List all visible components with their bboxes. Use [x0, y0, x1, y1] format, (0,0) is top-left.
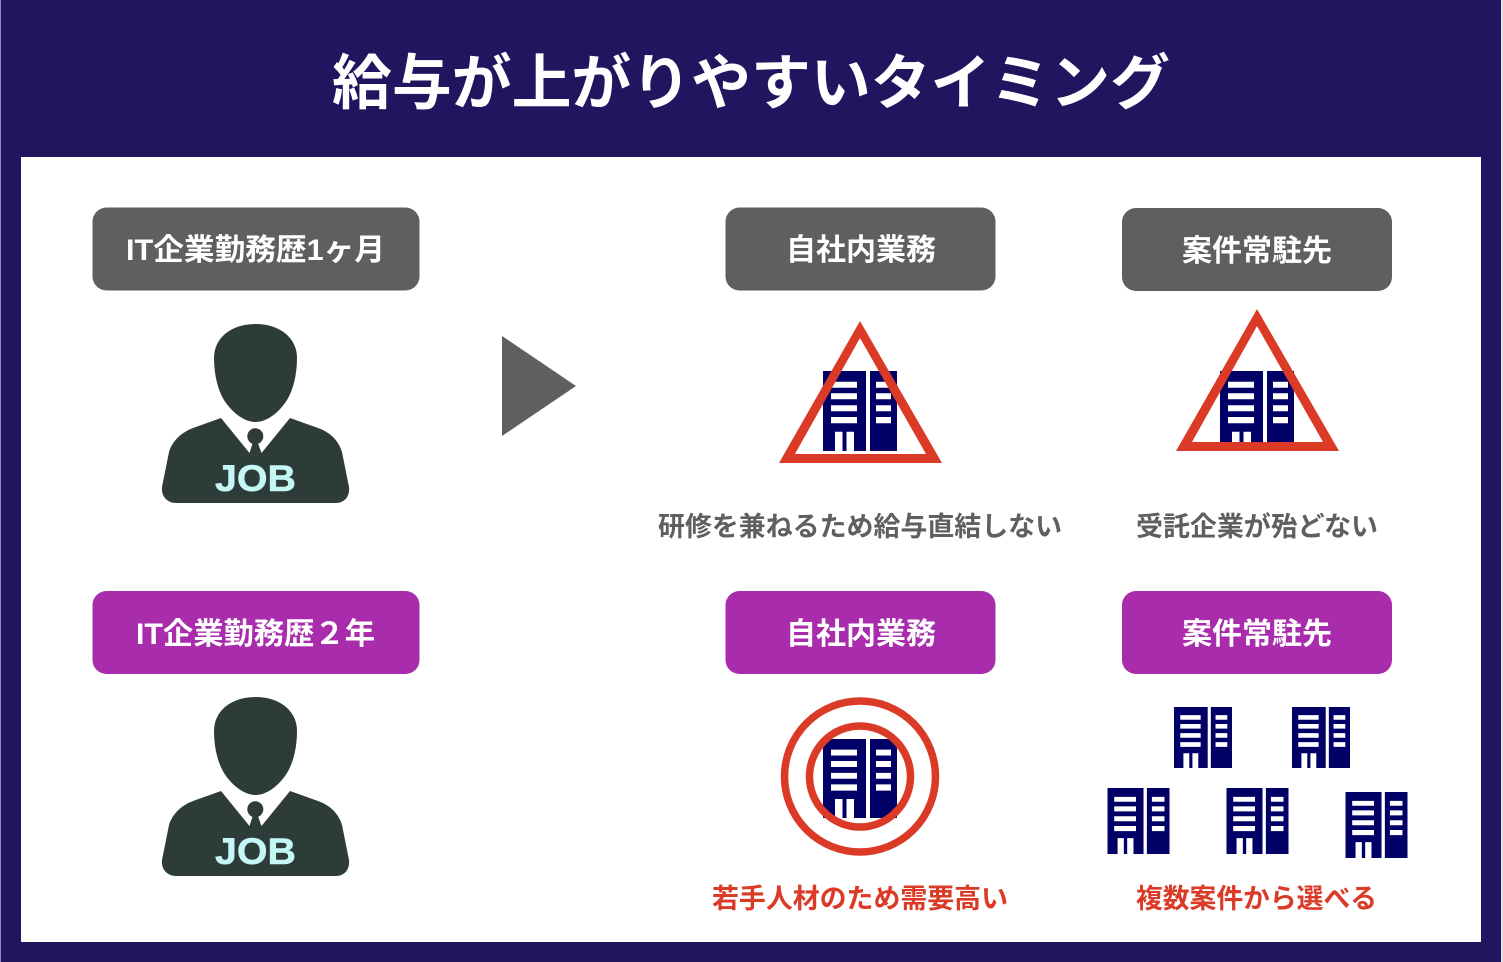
caption: client site drawback: 受託企業が殆どない	[1136, 511, 1378, 542]
label: in-house work, top	[726, 208, 996, 290]
icon: job person, one month	[162, 324, 349, 503]
label: one month tenure	[92, 208, 420, 290]
icon: building with double circle	[784, 701, 936, 852]
label: client site work, bottom: 案件常駐先	[1182, 618, 1332, 651]
label: one month tenure: IT企業勤務歴1ヶ月	[126, 234, 385, 267]
caption: in-house benefit: 若手人材のため需要高い	[712, 884, 1008, 914]
icon: job person, one month: JOB	[215, 458, 296, 499]
title: 給与が上がりやすいタイミング	[332, 50, 1170, 117]
label: two years tenure: IT企業勤務歴２年	[136, 618, 375, 651]
label: client site work, bottom	[1122, 591, 1392, 674]
arrow	[502, 336, 576, 436]
white content panel	[21, 157, 1481, 942]
label: client site work, top: 案件常駐先	[1182, 235, 1332, 268]
label: in-house work, bottom: 自社内業務	[786, 618, 936, 651]
label: client site work, top	[1122, 208, 1392, 291]
label: in-house work, top: 自社内業務	[786, 234, 936, 267]
icon: building with triangle, client site	[1176, 309, 1339, 451]
icon: group of five buildings	[1108, 707, 1408, 858]
label: in-house work, bottom	[726, 591, 996, 674]
label: two years tenure	[92, 591, 420, 674]
caption: client site benefit: 複数案件から選べる	[1136, 884, 1377, 914]
icon: job person, two years: JOB	[215, 831, 296, 872]
caption: in-house drawback: 研修を兼ねるため給与直結しない	[658, 512, 1062, 542]
icon: job person, two years	[162, 697, 349, 876]
icon: building with triangle, in-house	[779, 321, 942, 463]
